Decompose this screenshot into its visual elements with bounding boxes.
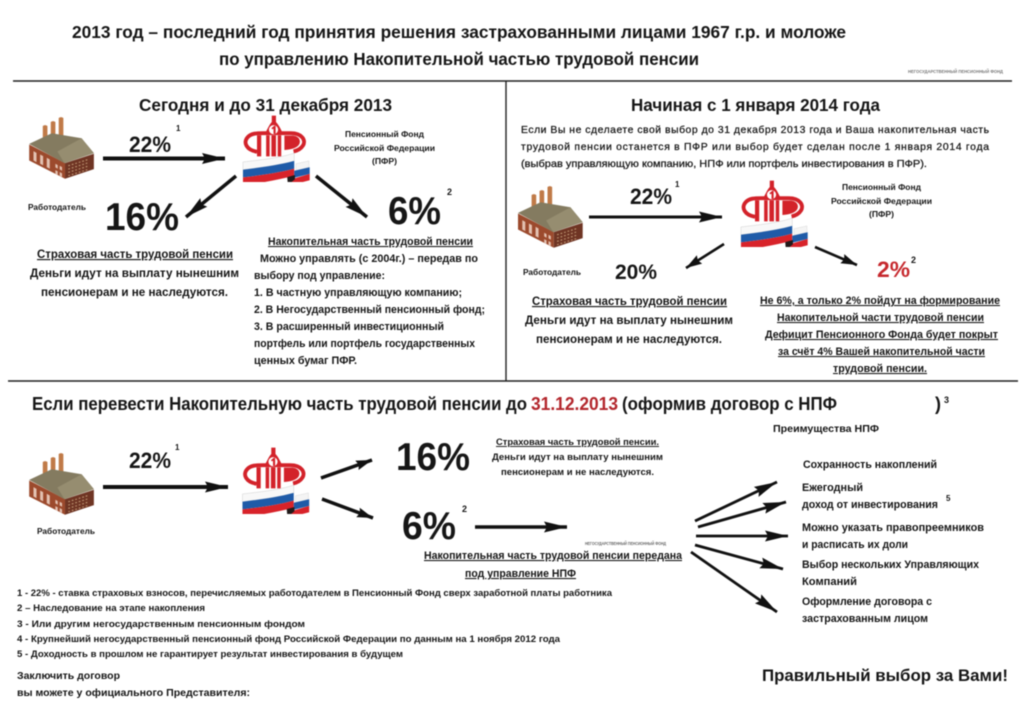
- value 2%: 2%: [877, 257, 910, 282]
- arrow: to 16%: [321, 460, 372, 478]
- panel: today until 31 December 2013: [28, 95, 485, 367]
- insurance part text: Страховая часть трудовой пенсии: [37, 249, 233, 261]
- insurance part text: Деньги идут на выплату нынешним: [492, 451, 663, 462]
- insurance part text: пенсионерам и не наследуются.: [536, 334, 722, 346]
- advantages list: и расписать их доли: [802, 539, 908, 551]
- value 6%: 6%: [388, 190, 441, 233]
- contact note: [17, 671, 250, 699]
- PFR label: Пенсионный Фонд: [842, 182, 922, 192]
- arrow: employer to fund: [103, 156, 225, 160]
- advantages list: доход от инвестирования: [802, 499, 938, 511]
- arrow: employer to fund: [589, 216, 722, 218]
- insurance part text: Деньги идут на выплату нынешним: [30, 268, 239, 280]
- title: по управлению Накопительной частью трудовой пенсии: [219, 49, 699, 69]
- insurance part text: [525, 296, 733, 346]
- heading: transfer: 3: [944, 395, 949, 405]
- arrow: to funded part: [815, 247, 857, 265]
- footnotes: [17, 588, 613, 659]
- heading: transfer: [32, 394, 949, 414]
- funded part text: Накопительная часть трудовой пенсии передана: [424, 550, 683, 562]
- contribution 22%: 22%: [129, 132, 171, 157]
- heading: transfer: ): [935, 394, 941, 414]
- advantages list: Можно указать правопреемников: [802, 522, 984, 534]
- value 20%: 20%: [615, 261, 657, 284]
- advantages list: застрахованным лицом: [802, 613, 928, 625]
- advantages list: Сохранность накоплений: [803, 459, 937, 471]
- heading: transfer: 31.12.2013: [531, 394, 618, 414]
- insurance part text: Деньги идут на выплату нынешним: [525, 315, 733, 327]
- advantages list: Компаний: [802, 576, 857, 588]
- funded part text: выбору под управление:: [254, 270, 385, 282]
- title: [72, 22, 846, 69]
- funded part text: портфель или портфель государственных: [254, 338, 475, 350]
- funded part text: под управление НПФ: [465, 568, 576, 580]
- PFR label: Пенсионный Фонд: [345, 129, 425, 139]
- advantages heading: Преимущества НПФ: [773, 424, 879, 435]
- employer label: Работодатель: [523, 267, 581, 277]
- insurance part text: пенсионерам и не наследуются.: [501, 466, 654, 477]
- PFR label: [334, 129, 435, 166]
- closing slogan: Правильный выбор за Вами!: [762, 667, 1008, 685]
- funded part text: [424, 550, 683, 580]
- PFR label: Российской Федерации: [831, 196, 932, 206]
- panel: starting 1 January 2014: [518, 95, 1000, 375]
- contribution 22%: 22%: [630, 184, 672, 209]
- PFR label: Российской Федерации: [334, 143, 435, 153]
- footnotes: 2 – Наследование на этапе накопления: [17, 603, 205, 613]
- title: 2013 год – последний год принятия решения застрахованными лицами 1967 г.р. и моложе: [72, 22, 846, 42]
- insurance part text: [30, 249, 239, 299]
- value 6%: 6%: [402, 505, 456, 548]
- footnotes: 3 - Или другим негосударственным пенсионным фондом: [17, 619, 305, 629]
- icon: PFR logo: [741, 181, 808, 251]
- icon: PFR logo: [242, 448, 309, 518]
- faded fund logo caption: НЕГОСУДАРСТВЕННЫЙ ПЕНСИОННЫЙ ФОНД: [908, 67, 1004, 74]
- faded fund logo caption: НЕГОСУДАРСТВЕННЫЙ ПЕНСИОННЫЙ ФОНД: [585, 541, 667, 546]
- value 2%: 2: [911, 255, 916, 265]
- icon: employer factory: [518, 186, 583, 248]
- footnotes: 1 - 22% - ставка страховых взносов, перечисляемых работодателем в Пенсионный Фонд сверх заработной платы работника: [17, 588, 613, 598]
- funded part text: Накопительная часть трудовой пенсии: [268, 236, 473, 248]
- arrows: fan to advantages: [691, 482, 788, 612]
- funded part text: 3. В расширенный инвестиционный: [254, 321, 444, 333]
- insurance part text: пенсионерам и не наследуются.: [41, 287, 228, 299]
- funded part text: Можно управлять (с 2004г.) – передав по: [260, 253, 479, 265]
- icon: employer factory: [29, 453, 94, 515]
- employer label: Работодатель: [37, 526, 95, 536]
- footnotes: 4 - Крупнейший негосударственный пенсионный фонд Российской Федерации по данным на 1 ноября 2012 года: [17, 634, 561, 644]
- intro paragraph: [521, 124, 989, 170]
- arrow: 6% to fund: [475, 525, 567, 529]
- PFR label: (ПФР): [869, 209, 894, 219]
- arrow: to funded part: [316, 176, 367, 217]
- arrow: to 6%: [322, 499, 373, 518]
- arrow: to insurance part: [186, 176, 236, 217]
- panel: transferring to a non-state fund: [29, 394, 984, 625]
- insurance part text: Страховая часть трудовой пенсии.: [496, 436, 659, 447]
- value 16%: 16%: [105, 196, 179, 239]
- advantages list: Выбор нескольких Управляющих: [802, 559, 979, 571]
- funded part text: 2. В Негосударственный пенсионный фонд;: [254, 304, 485, 316]
- funded part text: 1. В частную управляющую компанию;: [254, 287, 462, 299]
- heading: today: Сегодня и до 31 декабря 2013: [139, 95, 392, 115]
- contribution 22%: 1: [175, 443, 180, 452]
- insurance part text: Страховая часть трудовой пенсии: [532, 296, 727, 308]
- warning text: [760, 295, 1000, 375]
- heading: from 2014: Начиная с 1 января 2014 года: [631, 95, 880, 115]
- advantages list: Оформление договора с: [802, 596, 932, 608]
- value 6%: 2: [447, 187, 452, 197]
- advantages list: [802, 459, 984, 625]
- PFR label: (ПФР): [372, 156, 397, 166]
- warning text: Дефицит Пенсионного Фонда будет покрыт: [765, 329, 998, 341]
- contribution 22%: 1: [675, 180, 680, 189]
- warning text: Накопительной части трудовой пенсии: [777, 312, 984, 324]
- arrow: to insurance part: [686, 244, 724, 268]
- value 16%: 16%: [396, 436, 470, 479]
- heading: transfer: (оформив договор с НПФ: [622, 394, 837, 414]
- arrow: employer to fund: [103, 485, 228, 489]
- intro paragraph: (выбрав управляющую компанию, НПФ или портфель инвестирования в ПФР).: [521, 158, 927, 170]
- icon: PFR logo: [243, 116, 310, 186]
- warning text: за счёт 4% Вашей накопительной части: [778, 346, 985, 358]
- contribution 22%: [129, 124, 181, 157]
- warning text: трудовой пенсии.: [833, 363, 927, 375]
- value 6%: 2: [462, 504, 467, 514]
- heading: transfer: Если перевести Накопительную часть трудовой пенсии до: [32, 394, 527, 414]
- advantages list: 5: [946, 494, 951, 503]
- advantages list: Ежегодный: [802, 482, 863, 494]
- contact note: вы можете у официального Представителя:: [17, 687, 250, 699]
- contribution 22%: 22%: [129, 448, 171, 473]
- intro paragraph: Если Вы не сделаете свой выбор до 31 декабря 2013 года и Ваша накопительная часть: [521, 124, 989, 136]
- contact note: Заключить договор: [17, 671, 120, 682]
- icon: employer factory: [29, 117, 94, 179]
- PFR label: [831, 182, 932, 219]
- insurance part text: [492, 436, 663, 477]
- funded part text: [254, 236, 485, 367]
- intro paragraph: трудовой пенсии останется в ПФР или выбор будет сделан после 1 января 2014 года: [521, 141, 989, 153]
- employer label: Работодатель: [28, 202, 86, 212]
- footnotes: 5 - Доходность в прошлом не гарантирует результат инвестирования в будущем: [17, 649, 403, 659]
- warning text: Не 6%, а только 2% пойдут на формирование: [760, 295, 1000, 307]
- funded part text: ценных бумаг ПФР.: [254, 355, 357, 367]
- contribution 22%: 1: [176, 124, 181, 133]
